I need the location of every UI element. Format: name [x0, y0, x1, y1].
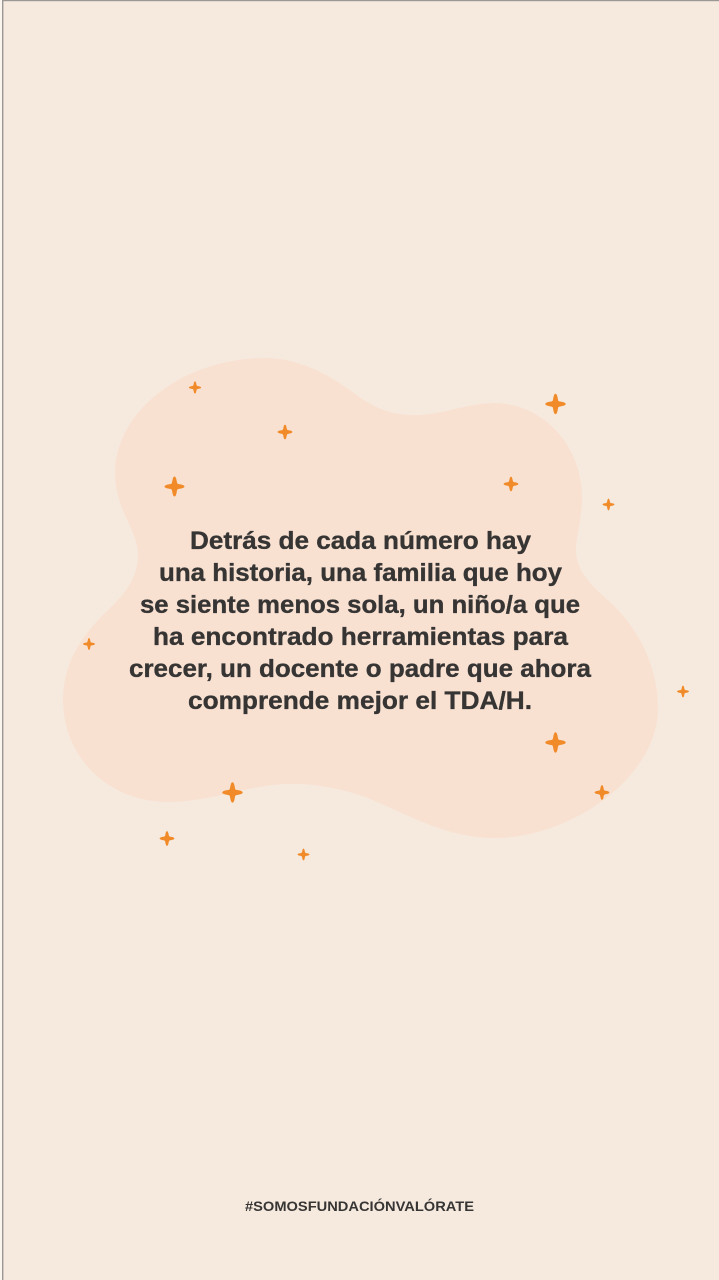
star: [546, 394, 565, 414]
star: [546, 733, 565, 752]
hashtag footer: #SOMOSFUNDACIÓNVALÓRATE: [245, 1197, 474, 1214]
star: [165, 477, 184, 496]
star: [595, 786, 609, 800]
star: [603, 499, 614, 510]
star: [504, 477, 518, 491]
main message text: una historia, una familia que hoy: [159, 559, 562, 587]
star: [677, 686, 689, 697]
main message text: ha encontrado herramientas para: [153, 623, 569, 651]
main message text: crecer, un docente o padre que ahora: [129, 655, 592, 683]
main message text: [129, 527, 592, 715]
star: [298, 849, 309, 860]
sparkle stars: [83, 382, 689, 860]
main message text: comprende mejor el TDA/H.: [188, 687, 532, 715]
background blob: [63, 358, 658, 838]
star: [223, 783, 242, 802]
star: [189, 382, 201, 393]
main message text: Detrás de cada número hay: [190, 527, 531, 555]
star: [160, 832, 174, 846]
main message text: se siente menos sola, un niño/a que: [140, 591, 580, 619]
star: [278, 425, 292, 439]
star: [83, 638, 95, 650]
